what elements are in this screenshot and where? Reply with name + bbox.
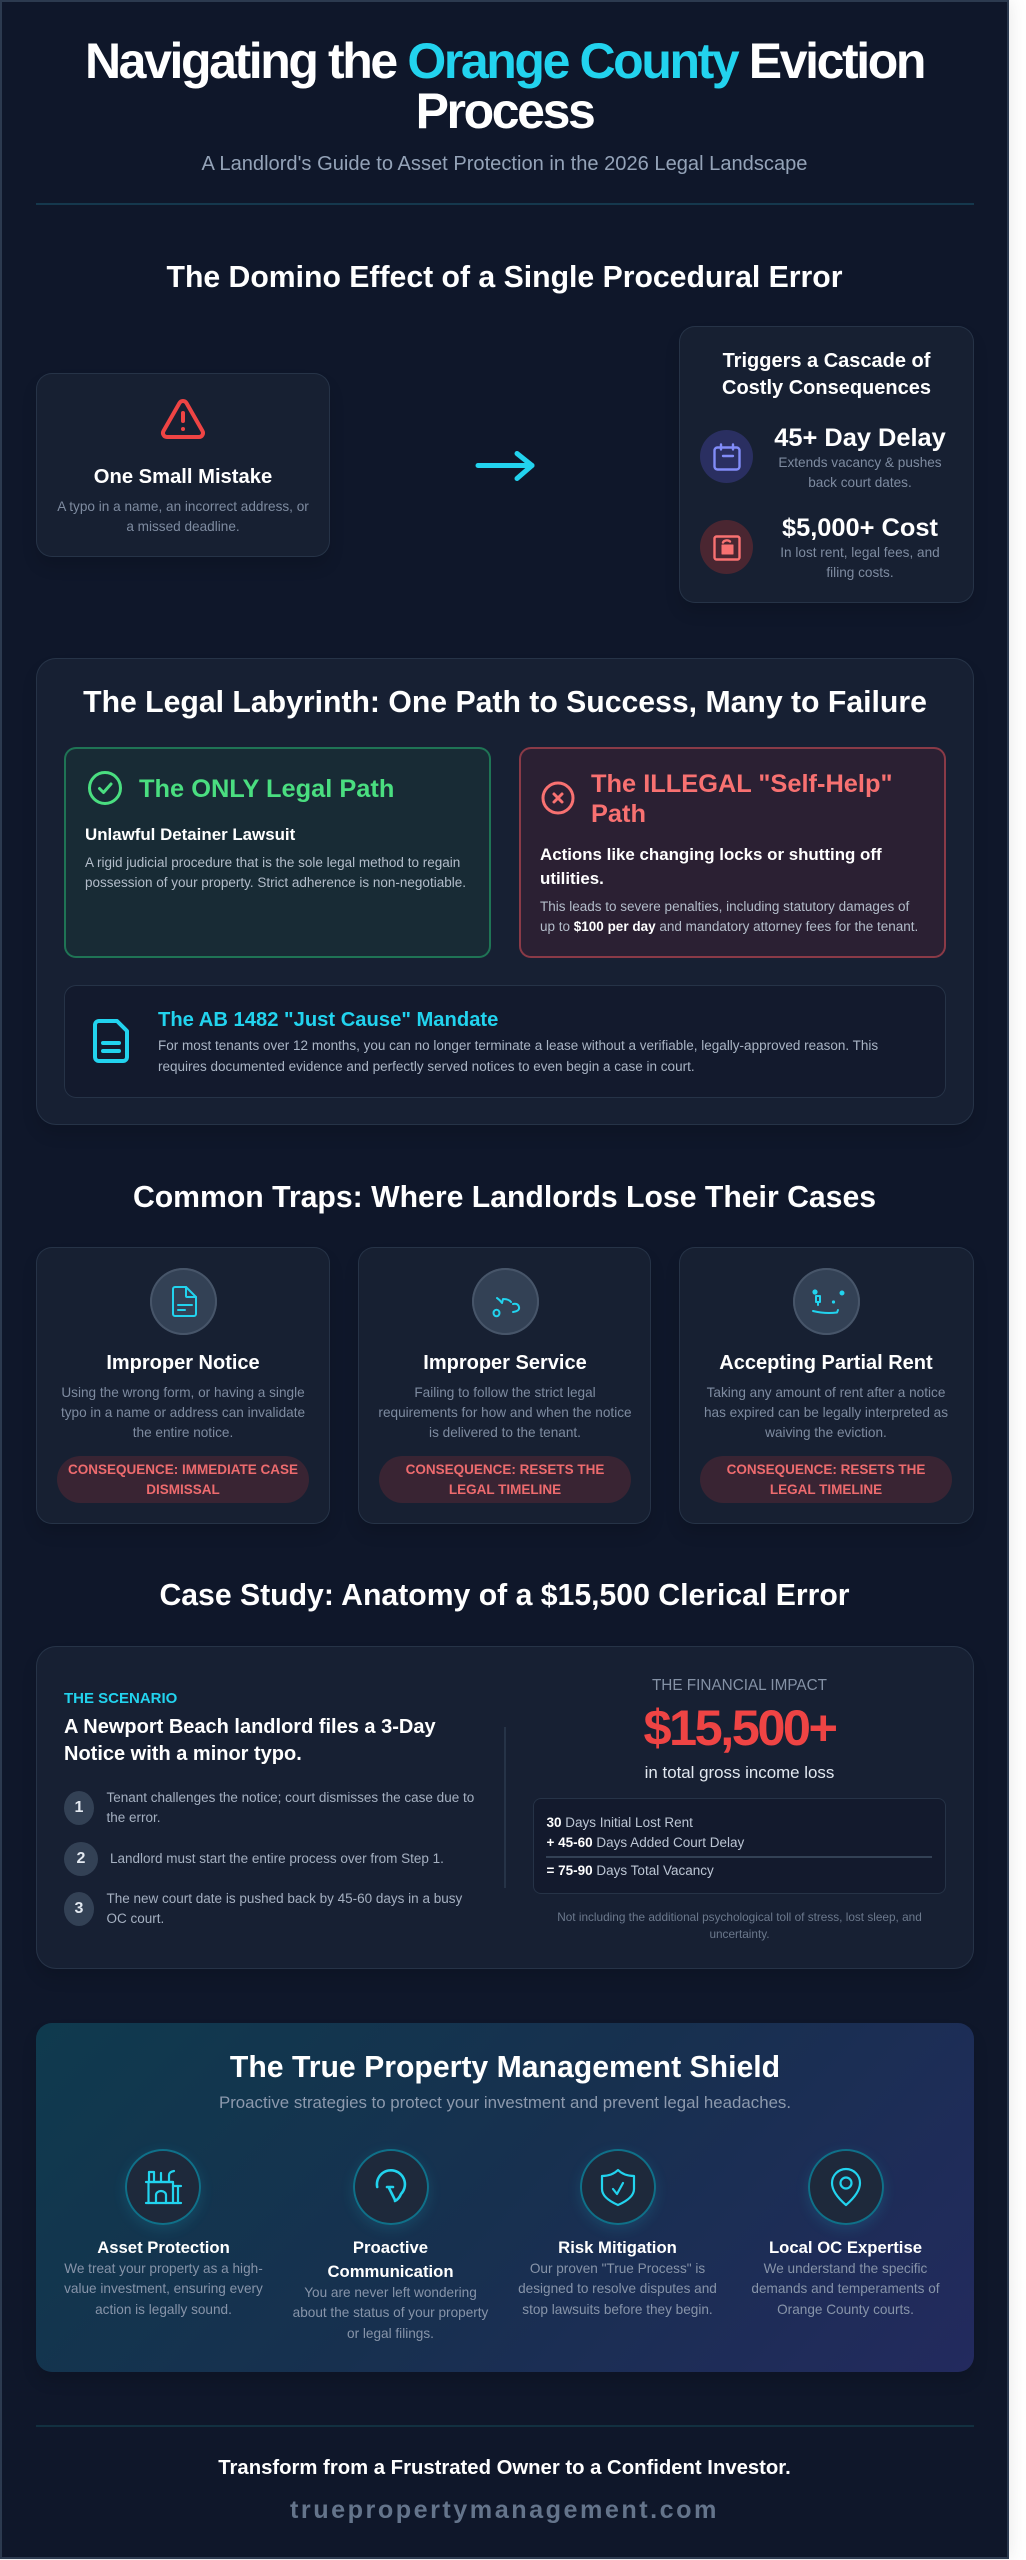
local expertise heading: Local OC Expertise [769,2238,922,2257]
panel: property management shield [36,2023,974,2372]
step text 1: Tenant challenges the notice; court dismisses the case due to [106,1790,474,1804]
proactive communication text [293,2285,488,2341]
scenario heading: Notice with a minor typo. [64,1742,302,1764]
asset protection text: action is legally sound. [95,2302,232,2317]
illegal path subtitle: utilities. [540,868,604,888]
illegal path title: Path [591,800,646,828]
icon: partial rent [792,1268,860,1335]
legal path description [85,854,466,890]
step text 3: OC court. [106,1911,164,1926]
trap description: is delivered to the tenant. [429,1425,581,1440]
title [85,33,924,139]
illegal path title: The ILLEGAL "Self-Help" [591,770,893,798]
trap description: waiving the eviction. [765,1425,887,1440]
mistake description [57,498,309,534]
icon: document [93,1019,129,1063]
vacancy breakdown box [533,1798,946,1894]
heading: common traps: Common Traps: Where Landlords Lose Their Cases [133,1180,876,1214]
step 1 [64,1790,474,1825]
consequence pill: LEGAL TIMELINE [449,1482,561,1496]
impact caption: in total gross income loss [645,1763,834,1782]
consequence pill: CONSEQUENCE: RESETS THE [727,1462,925,1476]
mistake description: a missed deadline. [126,519,240,534]
impact note [557,1910,922,1940]
shield heading: The True Property Management Shield [230,2051,780,2084]
trap description [378,1384,632,1440]
vacancy lines [546,1814,744,1850]
consequence pill: CONSEQUENCE: IMMEDIATE CASE [68,1462,298,1476]
mandate description [158,1038,878,1074]
panel: accepting partial rent [679,1247,974,1524]
panel: AB 1482 mandate [64,985,946,1098]
step number 1: 1 [75,1799,83,1816]
illegal path description [540,898,918,934]
arrow [476,451,534,481]
risk mitigation heading: Risk Mitigation [558,2238,677,2257]
stat: delay: 45+ Day Delay [774,424,946,452]
proactive communication text: or legal filings. [347,2326,434,2341]
consequence pill: LEGAL TIMELINE [770,1482,882,1496]
step number 2 [64,1842,98,1876]
footer website: truepropertymanagement.com [290,2496,719,2524]
trap description: has expired can be legally interpreted as [704,1405,948,1420]
proactive communication heading [327,2238,454,2281]
local expertise text [751,2261,940,2317]
title: Process [416,83,593,139]
trap description: Failing to follow the strict legal [414,1384,596,1400]
mandate title: The AB 1482 "Just Cause" Mandate [158,1009,498,1031]
trap heading: Accepting Partial Rent [719,1352,933,1374]
scenario label: THE SCENARIO [64,1690,177,1707]
heading: case study: Case Study: Anatomy of a $15,500 Clerical Error [159,1579,850,1612]
icon: warning triangle [160,399,205,439]
step number 2: 2 [77,1850,85,1867]
consequence pill [379,1456,631,1503]
icon: check circle [88,771,122,805]
trap description [61,1384,305,1440]
panel: one small mistake [36,373,330,557]
icon: x circle [542,782,574,814]
local expertise text: Orange County courts. [777,2302,914,2317]
asset protection heading: Asset Protection [97,2238,230,2257]
step number 1 [64,1791,94,1825]
footer tagline: Transform from a Frustrated Owner to a Confident Investor. [218,2457,791,2479]
proactive communication heading: Proactive [353,2238,428,2257]
icon: calendar [700,430,753,483]
illegal path description: This leads to severe penalties, including statutory damages of [540,898,909,914]
consequence pill [700,1456,952,1503]
stat description: cost [780,545,940,580]
icon: route [472,1268,538,1335]
panel: legal path [64,747,491,958]
panel: illegal path [519,747,946,958]
proactive communication text: You are never left wondering [304,2285,477,2300]
proactive communication text: about the status of your property [293,2305,488,2320]
icon: lock [700,520,753,574]
stat description: delay: Extends vacancy & pushes [778,455,942,470]
panel: cascade of consequences [679,326,974,603]
legal path title: The ONLY Legal Path [139,774,394,802]
scenario heading [64,1716,436,1764]
stat description: delay: back court dates. [808,475,912,490]
risk mitigation text: designed to resolve disputes and [518,2281,717,2296]
trap description [704,1384,948,1440]
local expertise text: We understand the specific [764,2261,927,2276]
trap description: Using the wrong form, or having a single [61,1384,305,1400]
step 3 [64,1890,462,1926]
impact number: $15,500+ [643,1699,836,1756]
trap description: requirements for how and when the notice [378,1405,632,1420]
stat description: cost: filing costs. [826,565,894,580]
vacancy lines: 30 Days Initial Lost Rent [546,1814,693,1830]
vacancy lines: + 45-60 Days Added Court Delay [546,1834,744,1850]
heading: domino effect: The Domino Effect of a Single Procedural Error [166,260,842,294]
step text 3 [106,1890,462,1926]
trap description: Taking any amount of rent after a notice [707,1384,945,1400]
cascade heading: Costly Consequences [722,377,931,399]
title: Navigating the Orange County Eviction [85,33,924,89]
impact note: uncertainty. [709,1926,770,1940]
stat description: delay [778,455,942,490]
panel: case study [36,1646,974,1969]
impact note: Not including the additional psychological toll of stress, lost sleep, and [557,1910,922,1924]
panel: improper service [358,1247,651,1524]
risk mitigation text: Our proven "True Process" is [530,2261,705,2276]
risk mitigation text [518,2261,717,2317]
trap heading: Improper Service [423,1352,587,1374]
icon: proactive communication [353,2149,429,2225]
legal path subtitle: Unlawful Detainer Lawsuit [85,824,295,844]
step number 3: 3 [75,1900,83,1917]
icon: risk mitigation [580,2149,656,2225]
mistake description: A typo in a name, an incorrect address, or [57,498,309,514]
step number 3 [64,1892,94,1926]
illegal path subtitle: Actions like changing locks or shutting off [540,844,882,864]
icon: local expertise [808,2149,884,2225]
impact label: THE FINANCIAL IMPACT [652,1676,827,1694]
subtitle: A Landlord's Guide to Asset Protection in the 2026 Legal Landscape [202,153,807,175]
illegal path subtitle [540,844,882,888]
cascade heading [722,350,931,399]
consequence pill [57,1456,309,1503]
vacancy total: = 75-90 Days Total Vacancy [546,1862,714,1878]
mandate description: requires documented evidence and perfectly served notices to even begin a case in court. [158,1058,695,1074]
mandate description: For most tenants over 12 months, you can no longer terminate a lease without a verifiable, legally-approved reason. This [158,1038,878,1053]
cascade heading: Triggers a Cascade of [723,350,930,372]
icon: asset protection [125,2149,201,2225]
trap description: the entire notice. [133,1425,233,1440]
stat: cost: $5,000+ Cost [782,514,938,542]
step text 1 [106,1790,474,1825]
step 2 [64,1842,444,1876]
scenario heading: A Newport Beach landlord files a 3-Day [64,1716,436,1738]
local expertise text: demands and temperaments of [751,2281,940,2296]
asset protection text: We treat your property as a high- [64,2261,263,2276]
consequence pill: DISMISSAL [146,1482,220,1496]
panel: legal labyrinth [36,658,974,1125]
risk mitigation text: stop lawsuits before they begin. [522,2302,713,2317]
trap heading: Improper Notice [106,1352,260,1374]
icon: file [150,1268,216,1335]
mistake heading: One Small Mistake [94,466,272,488]
shield subtitle: Proactive strategies to protect your investment and prevent legal headaches. [219,2093,791,2112]
stat description: cost: In lost rent, legal fees, and [780,545,940,560]
illegal path title [591,770,893,828]
asset protection text: value investment, ensuring every [64,2281,263,2296]
trap description: typo in a name or address can invalidate [61,1405,305,1420]
step text 1: the error. [106,1810,161,1825]
proactive communication heading: Communication [327,2262,454,2281]
consequence pill: CONSEQUENCE: RESETS THE [406,1462,604,1476]
legal path description: A rigid judicial procedure that is the sole legal method to regain [85,854,460,870]
heading: legal labyrinth: The Legal Labyrinth: One Path to Success, Many to Failure [83,686,927,719]
step text 2: Landlord must start the entire process over from Step 1. [110,1850,444,1866]
panel: improper notice [36,1247,330,1524]
illegal path description: up to $100 per day and mandatory attorney fees for the tenant. [540,918,918,934]
legal path description: possession of your property. Strict adherence is non-negotiable. [85,874,466,890]
asset protection text [64,2261,263,2317]
step text 3: The new court date is pushed back by 45-60 days in a busy [106,1890,462,1906]
